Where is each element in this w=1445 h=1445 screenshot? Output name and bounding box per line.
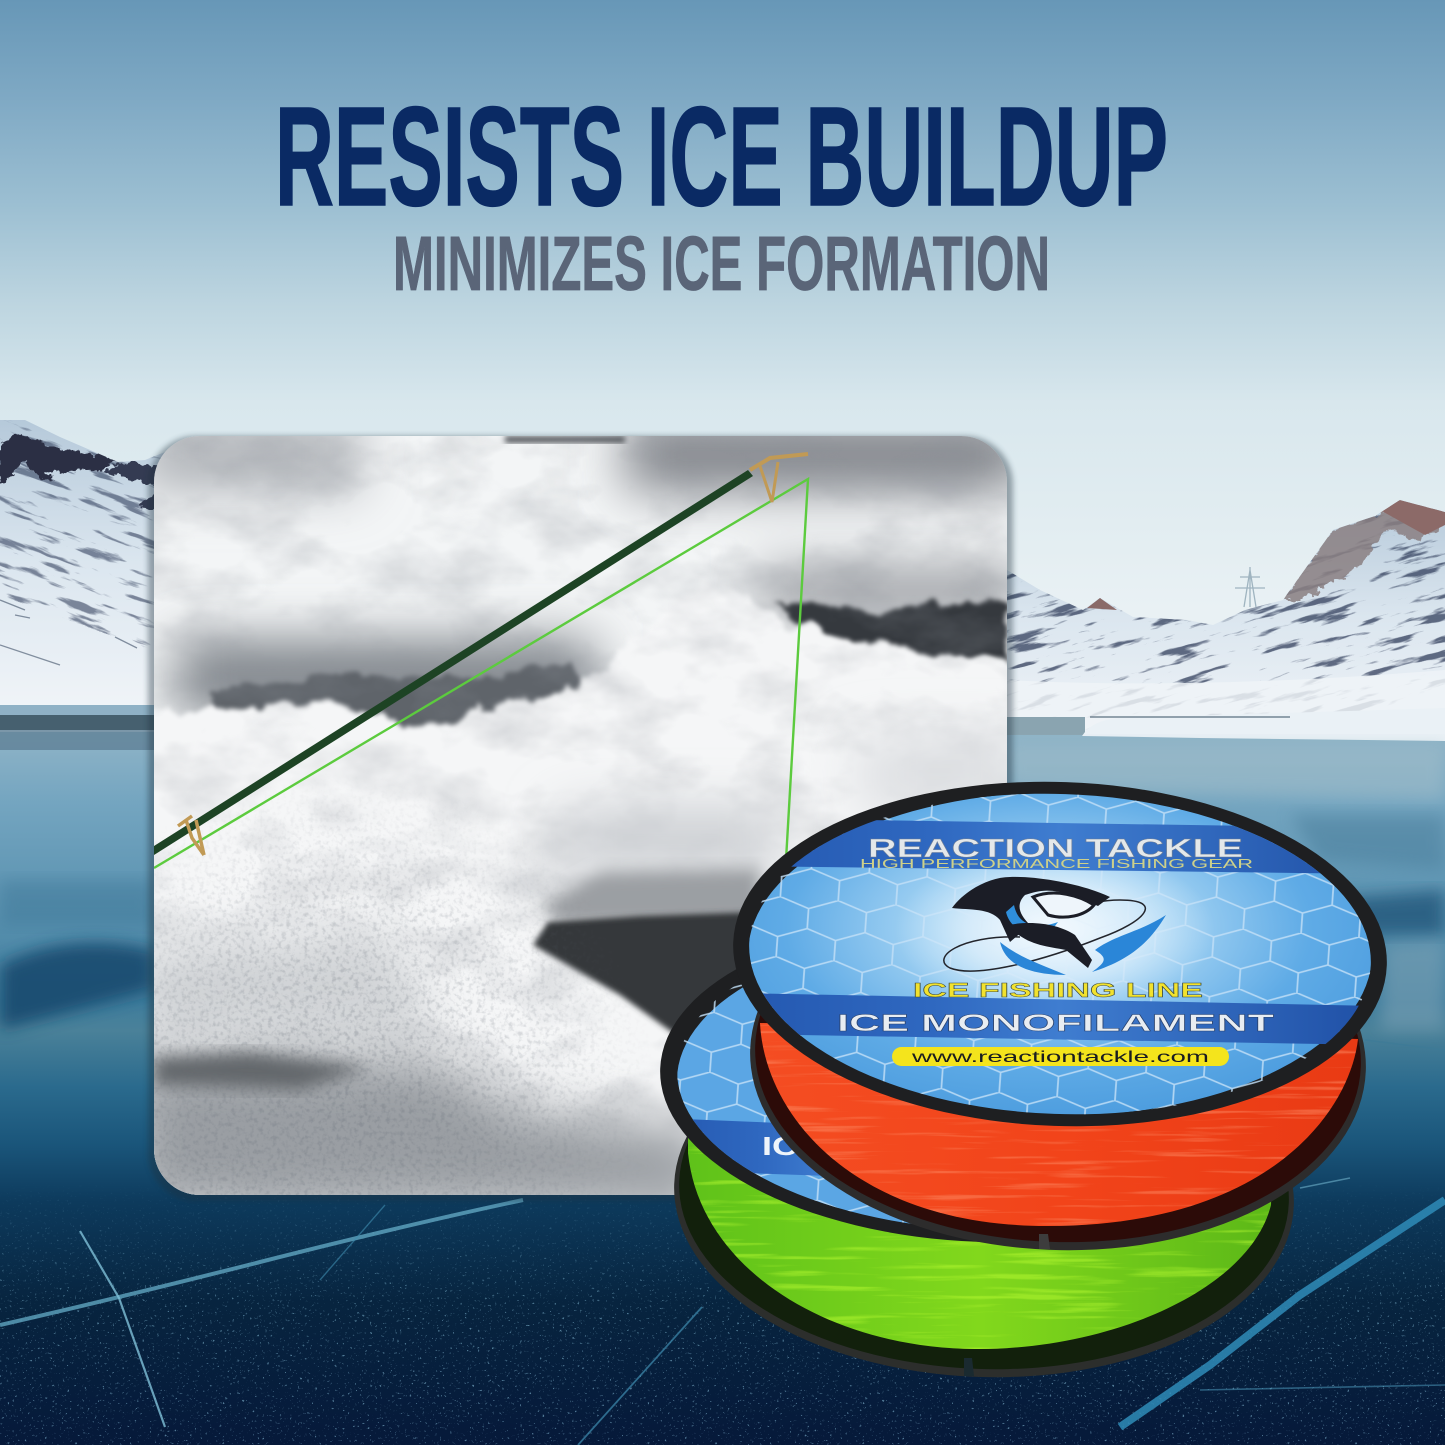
green line body: [680, 1130, 1280, 1355]
green fishing line: [154, 479, 808, 868]
fish belly and fin: [1008, 923, 1092, 968]
snow grain: [154, 812, 617, 1195]
background: ice cracks: [0, 1040, 1445, 1445]
product label: ICE FISHING LINE: [913, 980, 1203, 1002]
top disc rim: [727, 771, 1393, 1137]
background: right snowy mountains: [1007, 500, 1445, 717]
grey icy band above hole: [540, 868, 760, 925]
lower flange: [744, 859, 1372, 1261]
rod guide: lower: [178, 816, 204, 855]
bright snow bank: [140, 577, 1020, 1200]
background: sky: [0, 0, 1445, 760]
soft grey shadows in snow: [140, 420, 1025, 715]
website pill: www.reactiontackle.com: [910, 1049, 1209, 1066]
logo glow: [912, 869, 1200, 1000]
orange line body: [755, 1020, 1365, 1230]
fish back: [952, 877, 1110, 942]
dark water slivers: [215, 600, 1010, 738]
fishing line loops: [944, 900, 1145, 971]
brand name: REACTION TACKLE: [868, 833, 1243, 863]
grey shading in lower ice: [130, 740, 1030, 1210]
fish jaw: [1033, 893, 1094, 917]
lower flange: [668, 1002, 1300, 1388]
icon: leaping fish logo: [944, 877, 1166, 975]
green spool: [660, 970, 1294, 1378]
top disc label: ICE: [762, 1131, 822, 1161]
subtitle: MINIMIZES ICE FORMATION: [393, 221, 1050, 307]
background: power pylon: [1235, 567, 1265, 607]
ice base: [154, 436, 1007, 1195]
splash: [1000, 915, 1166, 975]
dark band in lower ice: [154, 1052, 370, 1090]
lower blue band: [740, 993, 1380, 1045]
fishing rod: [154, 470, 753, 855]
upper blue band: [791, 820, 1320, 874]
background: frozen lake: [0, 732, 1445, 1445]
background: lake reflections: [0, 745, 1445, 1030]
tagline: HIGH PERFORMANCE FISHING GEAR: [860, 856, 1253, 871]
top disc rim: [655, 907, 1315, 1253]
orange spool: [727, 771, 1393, 1261]
background: snow shoreline: [1082, 708, 1445, 741]
website pill: [892, 1047, 1229, 1066]
top disc label: [740, 790, 1380, 1120]
panel shadow: [148, 436, 1013, 1201]
panel: ice photo with rod and line: [130, 420, 1030, 1210]
background: dam wall: [0, 705, 1085, 750]
product type: ICE MONOFILAMENT: [837, 1010, 1275, 1037]
top disc label: [677, 984, 912, 1224]
dark top edge sliver: [505, 436, 625, 443]
dark water opening: [530, 908, 740, 1036]
cloudy variation: [154, 436, 1007, 1195]
blue stripe: [1006, 905, 1058, 933]
background: left snowy mountain: [0, 420, 165, 666]
rod guide: tip: [750, 454, 808, 502]
